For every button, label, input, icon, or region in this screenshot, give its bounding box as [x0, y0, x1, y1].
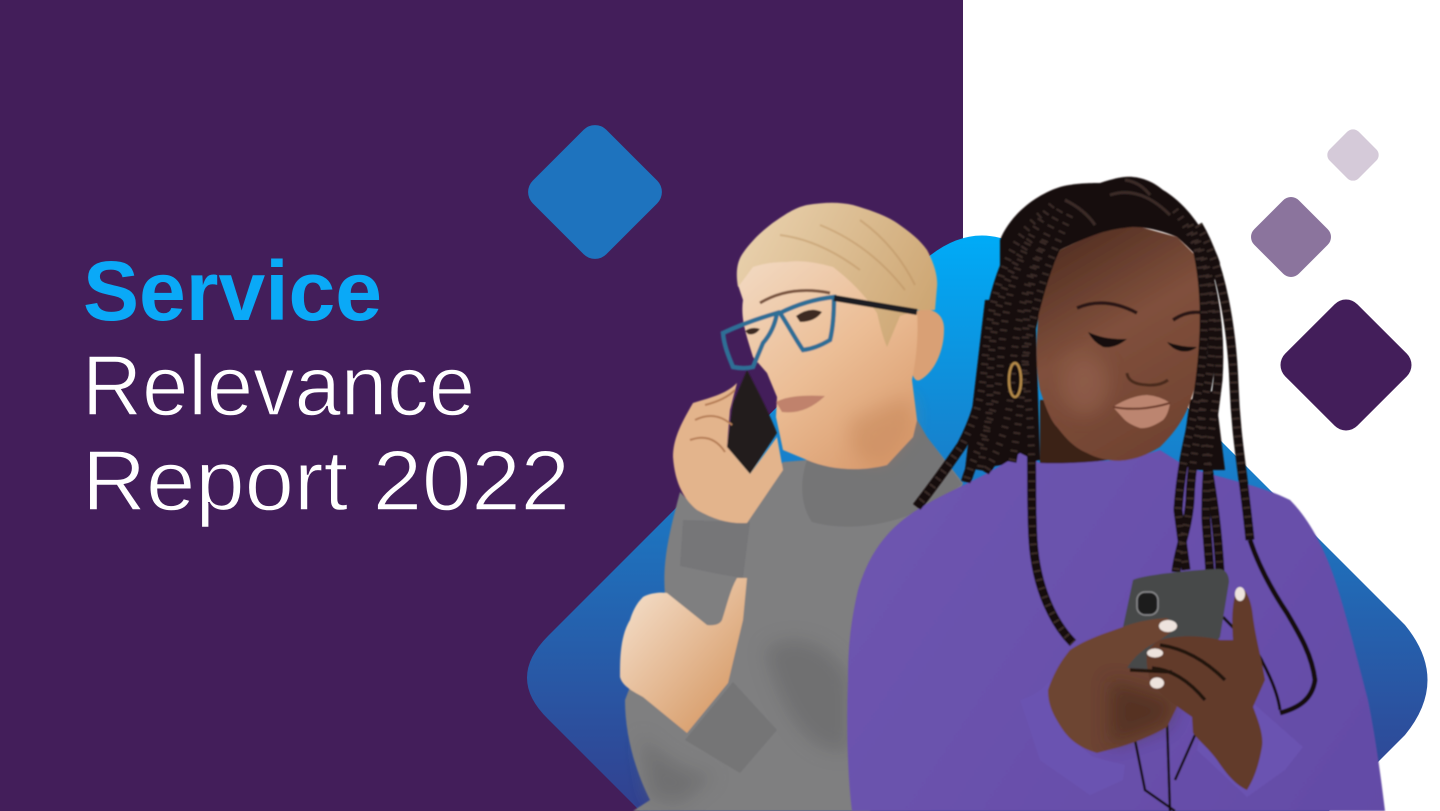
right hand: [1147, 587, 1265, 790]
hair top: [1000, 177, 1220, 303]
fingernails: [1147, 587, 1245, 688]
glasses: [723, 297, 917, 368]
purple sweater: [847, 450, 1385, 811]
finger lines: [690, 390, 735, 452]
lips: [776, 396, 825, 412]
earring: [1009, 363, 1021, 397]
icon: pale lilac diamond: [1324, 126, 1382, 184]
title: Service: [83, 244, 382, 338]
short blond hair: [737, 203, 937, 347]
hand on arm: [620, 578, 747, 733]
icon: mid purple diamond: [1246, 192, 1336, 282]
icon: dark purple diamond: [1274, 293, 1418, 437]
face shadow: [850, 399, 912, 463]
lower cuff: [685, 682, 777, 773]
turtleneck: [802, 420, 962, 527]
right braid texture: [1175, 210, 1250, 572]
grey sweater: [625, 420, 963, 811]
icon: blue diamond: [521, 118, 669, 266]
eyebrows: [1077, 303, 1203, 320]
right braid strands: [1175, 210, 1250, 572]
sleeve cuff: [680, 520, 750, 578]
cheek highlight: [1061, 355, 1109, 415]
finger gaps: [1130, 645, 1225, 700]
lips: [1113, 395, 1170, 428]
mouth line: [1113, 403, 1170, 409]
hanging cords: [1135, 720, 1195, 811]
face and neck: [738, 258, 917, 469]
left hand shading: [1110, 680, 1175, 745]
title: Report 2022: [82, 434, 570, 529]
eyebrows: [760, 291, 830, 303]
face: [1037, 225, 1203, 461]
braids behind head: [917, 205, 1073, 643]
far right braid: [1250, 540, 1315, 713]
left braid texture: [917, 205, 1073, 643]
hair highlights: [1065, 180, 1170, 225]
left hand: [1048, 618, 1178, 753]
braid back mass right: [1180, 390, 1225, 470]
left cuff: [1020, 680, 1125, 795]
neck: [1040, 400, 1150, 463]
hand at phone: [673, 383, 783, 523]
right cuff: [1197, 703, 1303, 797]
inner thin braid: [1223, 617, 1280, 710]
ear: [909, 309, 944, 380]
title: Relevance: [82, 339, 475, 434]
eyes: [745, 310, 822, 334]
title: [82, 244, 570, 529]
panel: purple background: [0, 0, 963, 811]
person: young woman with braids using phone: [847, 177, 1385, 811]
phone: [727, 370, 777, 474]
sweater shading: [640, 640, 850, 804]
nose: [1127, 373, 1168, 385]
phone: [1123, 569, 1229, 680]
left braid strands: [917, 205, 1073, 643]
phone camera: [1137, 592, 1158, 615]
person: older woman on phone: [620, 203, 963, 811]
eyes: [1088, 332, 1197, 352]
large gradient diamond backdrop: [527, 236, 1428, 811]
hair strands: [780, 220, 915, 290]
